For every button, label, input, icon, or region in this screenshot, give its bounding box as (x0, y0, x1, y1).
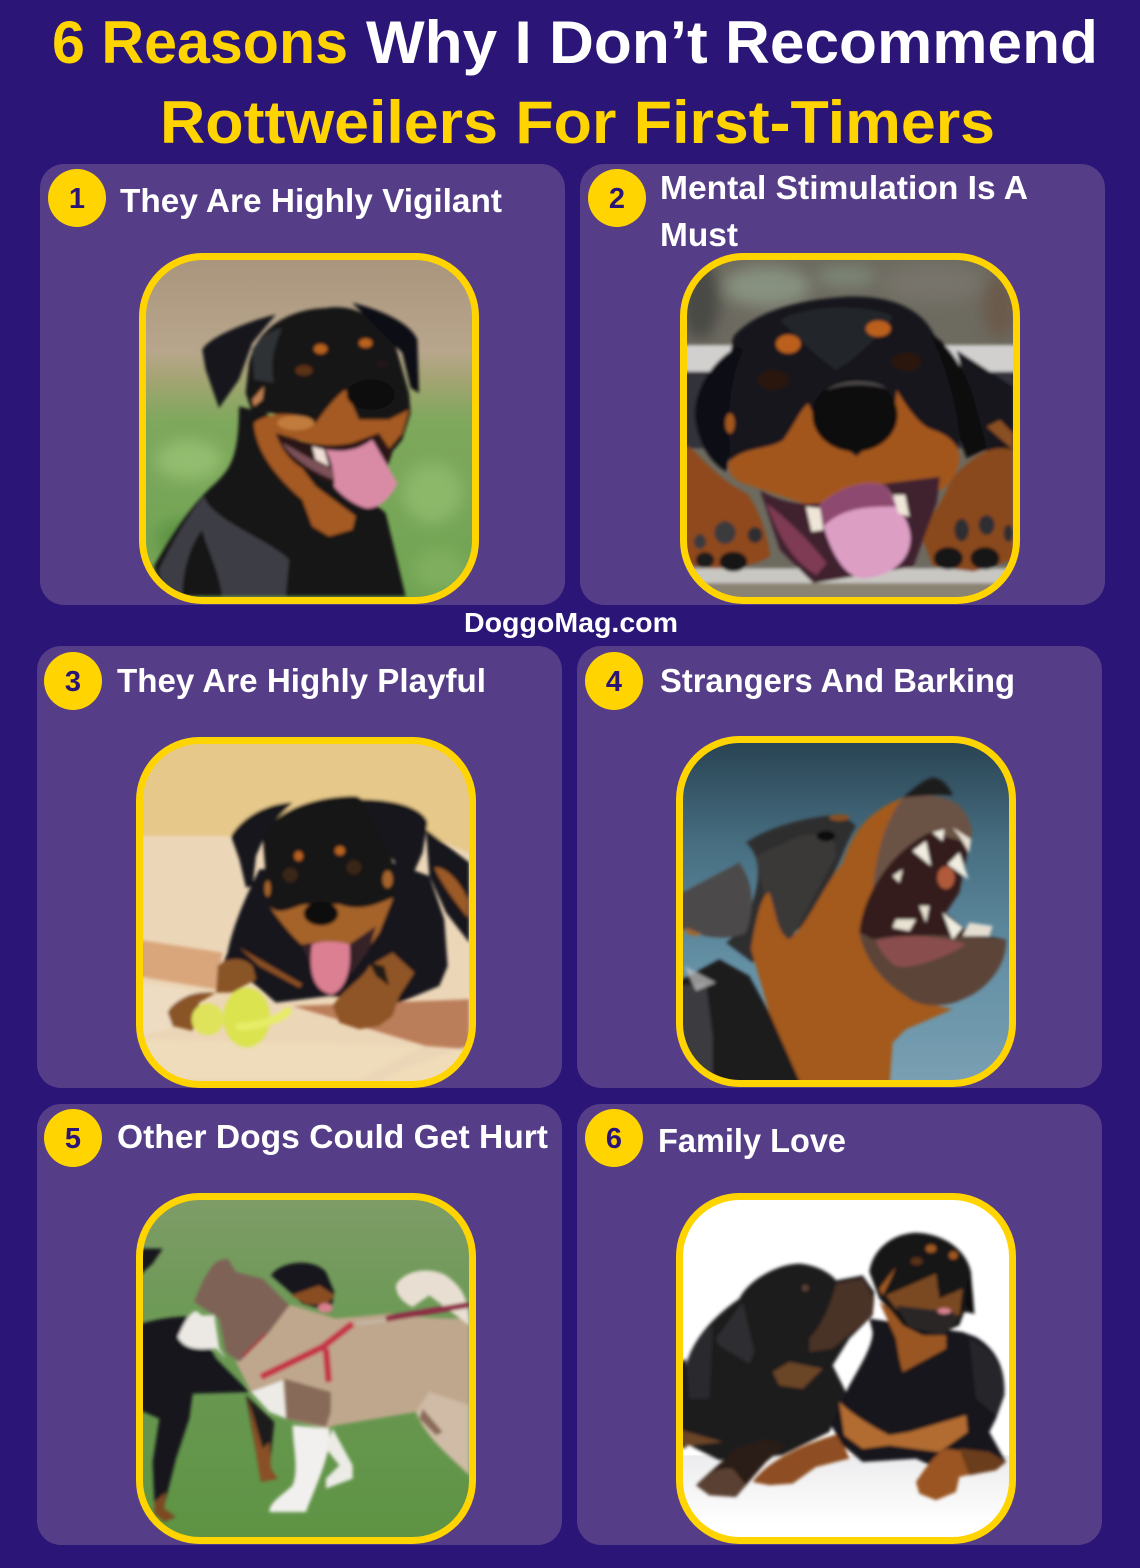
photo: barking rottweiler (676, 736, 1016, 1088)
heading 1: They Are Highly Vigilant (120, 182, 502, 219)
heading 2 (660, 169, 1028, 253)
photo frame 3 (140, 740, 472, 1084)
heading 3: They Are Highly Playful (117, 662, 486, 699)
number badge 2: 2 (609, 183, 625, 215)
number badge 5: 5 (65, 1123, 81, 1155)
number badge 3 (44, 652, 102, 710)
heading 2: Mental Stimulation Is A (660, 169, 1028, 206)
title: Rottweilers For First-Timers (160, 89, 995, 156)
panel 6: Family Love (577, 1104, 1102, 1545)
number badge 5 (44, 1109, 102, 1167)
heading 5: Other Dogs Could Get Hurt (117, 1118, 548, 1155)
title: 6 Reasons (52, 9, 348, 76)
heading 2: Must (660, 216, 738, 253)
number badge 4 (585, 652, 643, 710)
photo frame 2 (684, 256, 1016, 600)
panel 2: Mental Stimulation Is A Must (580, 164, 1105, 605)
heading 4: Strangers And Barking (660, 662, 1015, 699)
photo: puppy with yellow toy (136, 736, 476, 1088)
photo: rottweiler resting head on paws (680, 250, 1020, 605)
heading 6: Family Love (658, 1122, 846, 1159)
photo: rottweiler in grass (139, 253, 479, 605)
photo frame 4 (680, 740, 1012, 1084)
panel 3: They Are Highly Playful (37, 646, 562, 1088)
photo: two rottweilers nuzzling (676, 1192, 1016, 1544)
title: Why I Don’t Recommend (366, 9, 1098, 76)
photo frame 5 (140, 1196, 472, 1540)
photo: husky and rottweiler on grass (136, 1192, 476, 1544)
number badge 6: 6 (606, 1123, 622, 1155)
number badge 4: 4 (606, 666, 622, 698)
title (52, 9, 1098, 156)
photo frame 1 (142, 256, 476, 600)
panel 5: Other Dogs Could Get Hurt (37, 1104, 562, 1545)
panel 1: They Are Highly Vigilant (40, 164, 565, 605)
number badge 1 (48, 169, 106, 227)
photo frame 6 (680, 1196, 1012, 1540)
number badge 2 (588, 169, 646, 227)
watermark: DoggoMag.com (464, 607, 678, 638)
number badge 3: 3 (65, 666, 81, 698)
panel 4: Strangers And Barking (577, 646, 1102, 1088)
number badge 1: 1 (69, 183, 85, 215)
number badge 6 (585, 1109, 643, 1167)
